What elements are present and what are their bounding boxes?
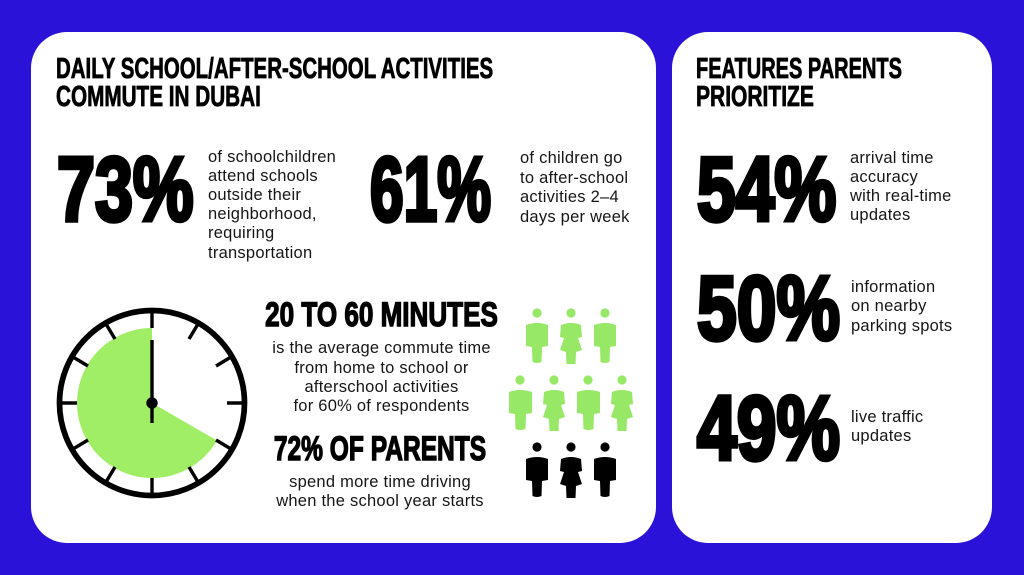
stat: 73%: neighborhood, — [208, 205, 317, 223]
stat: 54%: arrival time — [850, 149, 934, 167]
heading: daily commute — [56, 53, 493, 113]
stat: 50% — [697, 258, 952, 360]
stat: 73%: of schoolchildren — [208, 148, 336, 166]
stat: 61% — [370, 139, 630, 241]
panel: daily commute — [31, 32, 656, 543]
callout: 20 to 60 minutes — [265, 297, 498, 415]
people: green top row — [526, 308, 616, 364]
heading: daily commute: DAILY SCHOOL/AFTER-SCHOOL ACTIVITIES — [56, 53, 493, 85]
callout: 20 to 60 minutes: from home to school or — [294, 359, 469, 377]
stat: 54%: with real-time — [849, 187, 952, 205]
callout: 20 to 60 minutes: afterschool activities — [304, 378, 459, 396]
stat: 61%: of children go — [520, 149, 623, 167]
people chart — [509, 308, 633, 498]
callout: 72% of parents — [274, 430, 486, 510]
heading: features: FEATURES PARENTS — [696, 52, 902, 85]
heading: daily commute: COMMUTE IN DUBAI — [56, 81, 261, 113]
stat: 54%: 54% — [697, 140, 836, 241]
stat: 50%: 50% — [697, 258, 840, 360]
people: green middle row — [509, 375, 633, 431]
stat: 54% — [697, 140, 952, 241]
stat: 61%: activities 2–4 — [520, 188, 619, 206]
stat: 54%: accuracy — [850, 168, 919, 186]
heading: features: PRIORITIZE — [696, 81, 814, 113]
stat: 61%: days per week — [520, 208, 630, 226]
stat: 73% — [57, 139, 336, 262]
icon: clock — [60, 310, 245, 496]
stat: 49% — [697, 378, 923, 480]
stat: 50%: parking spots — [851, 317, 952, 335]
stat: 54%: updates — [850, 206, 910, 224]
callout: 20 to 60 minutes: is the average commute time — [272, 339, 491, 357]
callout: 20 to 60 minutes: 20 TO 60 MINUTES — [265, 297, 498, 334]
stat: 73%: transportation — [208, 244, 312, 262]
stat: 49%: live traffic — [851, 408, 923, 426]
callout: 72% of parents: 72% OF PARENTS — [274, 430, 486, 468]
stat: 73%: outside their — [208, 186, 301, 204]
stat: 50%: information — [851, 278, 935, 296]
stat: 73%: 73% — [57, 139, 194, 241]
stat: 73%: attend schools — [208, 167, 318, 185]
callout: 20 to 60 minutes: for 60% of respondents — [293, 397, 470, 415]
stat: 49%: 49% — [697, 378, 840, 480]
heading: features — [696, 52, 902, 113]
stat: 61%: 61% — [370, 139, 491, 241]
stat: 61%: to after-school — [520, 169, 628, 187]
callout: 72% of parents: when the school year starts — [275, 492, 484, 510]
people: black bottom row — [526, 442, 616, 498]
callout: 72% of parents: spend more time driving — [289, 473, 471, 491]
stat: 49%: updates — [851, 427, 911, 445]
stat: 73%: requiring — [208, 224, 274, 242]
stat: 50%: on nearby — [851, 297, 927, 315]
panel: features parents prioritize — [672, 32, 992, 543]
